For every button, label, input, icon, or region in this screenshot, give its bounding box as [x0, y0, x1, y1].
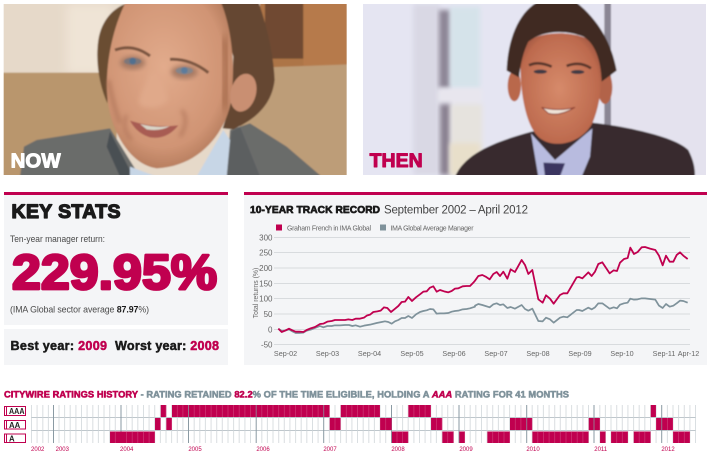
x axis labels: Sep-06 [442, 349, 466, 358]
line: IMA Global average manager [278, 298, 688, 333]
legend [276, 224, 474, 232]
year labels: 2006 [256, 447, 270, 453]
line: Graham French in IMA Global [278, 247, 688, 332]
month separators over rating periods [32, 405, 696, 443]
year labels: 2012 [661, 447, 675, 453]
x axis labels [274, 349, 699, 358]
x axis labels: Sep-09 [568, 349, 592, 358]
year lines over rating periods [188, 405, 662, 443]
AA rating periods [155, 418, 673, 430]
text: sector average: (IMA Global sector average 87.97%) [10, 304, 149, 314]
year labels: 2007 [323, 447, 337, 453]
y axis labels: -50 [261, 340, 273, 350]
heading: citywire ratings history: CITYWIRE RATINGS HISTORY - RATING RETAINED 82.2% OF THE TIME ELIGIBILE, HOLDING A AAA RATING FOR 41 MONTHS [4, 390, 569, 400]
y axis title: Total returns (%) [253, 268, 260, 318]
y axis labels: 150 [259, 280, 273, 288]
year labels [31, 447, 675, 453]
y axis labels: 100 [259, 294, 273, 304]
panel: best and worst year [4, 329, 228, 365]
row lines [31, 418, 696, 430]
photo: now portrait [0, 0, 350, 177]
subheading: date range: September 2002 – April 2012 [384, 204, 528, 216]
caption: NOW: NOW [11, 151, 61, 173]
heading: 10-year track record: 10-YEAR TRACK RECORD [250, 205, 380, 216]
x axis labels: Apr-12 [678, 349, 699, 358]
rating row labels: AA [9, 421, 21, 430]
year labels: 2002 [31, 447, 45, 453]
year labels: 2003 [56, 447, 70, 453]
x axis labels: Sep-10 [610, 349, 634, 358]
year labels: 2005 [188, 447, 202, 453]
x axis labels: Sep-11 [653, 349, 675, 358]
year labels: 2010 [526, 447, 540, 453]
y axis labels: 200 [259, 264, 273, 273]
year grid [54, 405, 662, 443]
rating row labels: A [9, 434, 15, 443]
year labels: 2011 [594, 447, 608, 453]
legend: IMA Global Average Manager [390, 226, 474, 232]
line chart [253, 234, 699, 358]
caption: THEN: THEN [370, 151, 423, 172]
photo: then portrait [355, 0, 710, 177]
ratings chart [4, 405, 696, 453]
AAA rating periods [161, 405, 656, 417]
x axis labels: Sep-03 [316, 349, 339, 358]
year labels: 2004 [120, 447, 134, 453]
y axis labels: 0 [268, 326, 273, 334]
x axis labels: Sep-05 [400, 349, 424, 358]
year labels: 2008 [391, 447, 405, 453]
text: worst year: Worst year: 2008 [115, 339, 219, 353]
A rating periods [110, 432, 690, 443]
legend: Graham French in IMA Global [287, 226, 371, 232]
panel: key stats [4, 192, 228, 325]
y axis labels: 50 [264, 310, 273, 319]
panel: track record chart [244, 192, 707, 365]
y axis labels [259, 234, 273, 350]
big number: 229.95%: 229.95% [12, 246, 217, 300]
x axis labels: Sep-08 [526, 349, 550, 358]
x axis labels: Sep-07 [484, 349, 508, 358]
x axis labels: Sep-04 [358, 349, 381, 358]
text: ten-year manager return label: Ten-year manager return: [10, 234, 105, 244]
rating row labels: AAA [9, 407, 25, 416]
rating row labels [4, 406, 26, 443]
heading: key stats: KEY STATS [12, 201, 120, 223]
text: best year: Best year: 2009 [10, 339, 107, 353]
month grid [32, 405, 696, 443]
x axis labels: Sep-02 [274, 349, 297, 358]
year labels: 2009 [459, 447, 473, 453]
y axis labels: 250 [259, 248, 273, 258]
y axis labels: 300 [259, 234, 273, 242]
